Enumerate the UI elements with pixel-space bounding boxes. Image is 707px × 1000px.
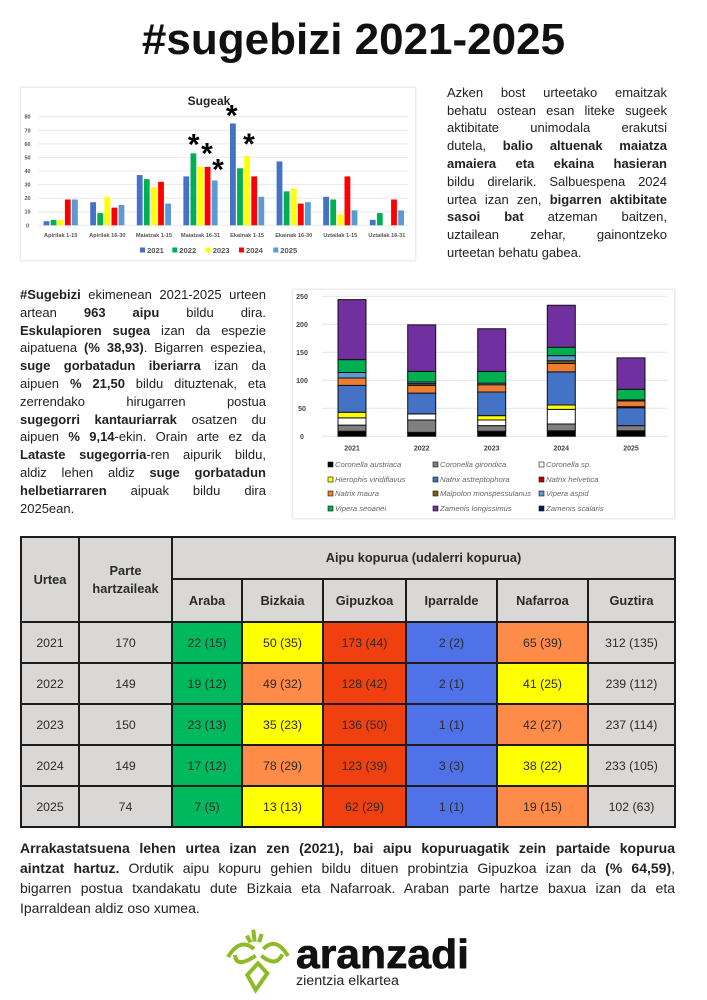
text block: species summary: sugegorri kantauriarrak osatzen du (20, 412, 266, 427)
x axis labels (44, 233, 405, 239)
text block: species summary: aipatuena (% 38,93). Bigarren espeziea, (20, 340, 266, 355)
text block: activity summary: bildu direlarik. Salbuespena 2024 (447, 174, 667, 189)
significance asterisks: * (226, 100, 238, 133)
y axis labels: 70 (24, 128, 31, 134)
legend: Vipera aspid (546, 489, 589, 498)
y axis labels: 80 (24, 115, 31, 121)
data table: citations by year and province: 19 (15) (523, 800, 562, 814)
data table: citations by year and province: 149 (115, 676, 136, 690)
data table: citations by year and province: 23 (13) (188, 718, 226, 732)
significance asterisks (188, 100, 255, 187)
data table: citations by year and province: 13 (13) (263, 800, 302, 814)
data table: citations by year and province: 19 (12) (188, 676, 226, 690)
data table: citations by year and province: 17 (12) (188, 758, 226, 772)
data table: citations by year and province: Urtea (34, 572, 66, 586)
data table: citations by year and province: 123 (39) (342, 758, 387, 772)
x axis labels: Uztailak 1-15 (323, 233, 357, 239)
data table: citations by year and province: 150 (115, 718, 136, 732)
data table: citations by year and province: Araba (189, 592, 225, 608)
y axis labels: 250 (296, 294, 308, 301)
x axis labels: Apirilak 1-15 (44, 233, 77, 239)
legend: Natrix maura (335, 489, 380, 498)
text block: conclusion: Iparraldean aldiz oso xumea. (20, 900, 200, 916)
text block: conclusion: Arrakastatsuena lehen urtea izan zen (2021), bai aipu kopuruagatik zein partaide kopurua (20, 840, 675, 856)
y axis labels: 30 (24, 183, 31, 189)
data table: citations by year and province: 102 (63) (609, 800, 654, 814)
text block: species summary: 2025ean. (20, 501, 74, 516)
wordmark: aranzadi (296, 931, 469, 977)
x axis labels: 2025 (623, 446, 639, 452)
data table: citations by year and province: 173 (44) (342, 636, 387, 650)
text block: activity summary: dutela, balio altuenak maiatza (447, 138, 667, 153)
y axis labels (24, 115, 31, 229)
data table: citations by year and province: Guztira (609, 592, 654, 608)
data table: citations by year and province: 1 (1) (439, 800, 464, 814)
legend: Hierophis viridiflavus (335, 475, 406, 484)
chart title: Sugeak (188, 94, 231, 108)
y axis labels: 40 (24, 169, 31, 175)
y axis labels: 10 (24, 210, 31, 216)
data table: citations by year and province: 2023 (36, 718, 64, 732)
x axis labels (344, 446, 639, 452)
text block: conclusion: bigarren postua txandakatu dute Bizkaia eta Nafarroak. Araban parte hartze baxua izan da eta (20, 880, 675, 896)
data table: citations by year and province: 1 (1) (439, 718, 464, 732)
data table: citations by year and province: 35 (23) (263, 718, 302, 732)
text block: species summary: aipuen % 9,14-ekin. Orain arte ez da (20, 429, 266, 444)
data table: citations by year and province: 149 (115, 758, 136, 772)
x axis labels: Ekainak 16-30 (275, 233, 312, 239)
data table: citations by year and province: 38 (22) (523, 758, 562, 772)
y axis labels: 0 (26, 223, 29, 229)
x axis labels: 2021 (344, 446, 360, 452)
text block: activity summary: aktibitate unimodala erakutsi (447, 120, 667, 135)
text block: species summary: Lataste sugegorria-ren aipurik bildu, (20, 447, 266, 462)
text block: activity summary: behatu ostean esan liteke sugeek (447, 103, 667, 118)
text block: conclusion: aintzat hartuz. Ordutik aipu kopuru gehien bildu dituen probintzia Gipuzkoa izan da (% 64,59), (20, 860, 675, 876)
data table: citations by year and province: 49 (32) (263, 676, 302, 690)
data table: citations by year and province: Nafarroa (516, 592, 569, 608)
data table: citations by year and province: 2025 (36, 800, 64, 814)
text block: species summary: suge gorbatadun iberiarra izan da (20, 358, 266, 373)
data table: citations by year and province: 41 (25) (523, 676, 562, 690)
x axis labels: Uztailak 16-31 (368, 233, 405, 239)
legend (328, 460, 604, 513)
data table: citations by year and province: 62 (29) (345, 800, 384, 814)
panel: stacked bar chart of species (292, 289, 675, 519)
text block: species summary (20, 287, 266, 516)
text block: activity summary: uztailean zehar, gainontzeko (447, 227, 667, 242)
data table: citations by year and province: Gipuzkoa (336, 592, 393, 608)
data table: citations by year and province: Bizkaia (260, 592, 305, 608)
legend: Zamenis scalaris (545, 504, 604, 513)
y axis labels: 20 (24, 196, 31, 202)
legend: 2021 (147, 246, 165, 255)
text block: species summary: Eskulapioren sugea izan da espezie (20, 323, 266, 338)
data table: citations by year and province: 2022 (36, 676, 64, 690)
text block: species summary: helbetiarraren aipuak bildu dira (20, 483, 266, 498)
data table: citations by year and province: 239 (112) (606, 676, 657, 690)
legend: Vipera seoanei (335, 504, 386, 513)
data table: citations by year and province: Aipu kopurua (udalerri kopurua) (326, 550, 521, 565)
text block: activity summary (447, 85, 668, 260)
data table: citations by year and province: 2 (1) (439, 676, 464, 690)
data table: citations by year and province: Parte (109, 562, 142, 578)
data table: citations by year and province: 7 (5) (194, 800, 220, 814)
data table: citations by year and province: 78 (29) (263, 758, 302, 772)
data table: citations by year and province: 128 (42) (342, 676, 387, 690)
text block: species summary: zerrendako hirugarren postua (20, 394, 266, 409)
data table: citations by year and province: Iparralde (424, 592, 479, 608)
y axis labels (296, 294, 308, 441)
data table: citations by year and province: 233 (105) (605, 758, 658, 772)
text block: activity summary: amaiera eta ekaina hasieran (447, 156, 667, 171)
significance asterisks: * (201, 138, 213, 171)
legend: Malpolon monspessulanus (440, 489, 531, 498)
text block: activity summary: sasoi bat atzeman baitzen, (447, 209, 667, 224)
data table: citations by year and province: 74 (119, 800, 132, 814)
x axis labels: 2022 (414, 446, 430, 452)
y axis labels: 150 (296, 350, 308, 357)
significance asterisks: * (188, 129, 200, 162)
text block: species summary: aipuen % 21,50 bildu dituztenak, eta (20, 376, 266, 391)
legend: 2024 (246, 246, 264, 255)
data table: citations by year and province: 42 (27) (523, 718, 562, 732)
legend: Coronella girondica (440, 460, 507, 469)
text block: species summary: #Sugebizi ekimenean 2021-2025 urteen (20, 287, 266, 302)
legend: Natrix helvetica (546, 475, 599, 484)
significance asterisks: * (243, 128, 255, 161)
data table: citations by year and province (20, 536, 676, 828)
legend: Zamenis longissimus (439, 504, 512, 513)
legend (140, 246, 298, 255)
legend: 2022 (179, 246, 196, 255)
x axis labels: Ekainak 1-15 (230, 233, 264, 239)
text block: activity summary: urteetan behatu gabea. (447, 245, 581, 260)
y axis labels: 50 (298, 406, 306, 413)
data table: citations by year and province: 170 (115, 636, 136, 650)
data table: citations by year and province: hartzaileak (92, 580, 159, 596)
data table: citations by year and province: 237 (114) (606, 718, 657, 732)
x axis labels: Apirilak 16-30 (89, 233, 125, 239)
x axis labels: 2023 (484, 446, 500, 452)
tagline: zientzia elkartea (296, 973, 400, 988)
panel: bar chart Sugeak (20, 87, 416, 261)
data table: citations by year and province: 50 (35) (263, 636, 302, 650)
data table: citations by year and province: 312 (135) (605, 636, 658, 650)
bars (44, 123, 404, 225)
data table: citations by year and province: 22 (15) (188, 636, 226, 650)
legend: 2025 (280, 246, 298, 255)
x axis labels: Maiatzak 1-15 (136, 233, 172, 239)
x axis labels: 2024 (554, 446, 569, 452)
title: #sugebizi 2021-2025 (142, 15, 565, 64)
legend: Coronella sp. (546, 460, 591, 469)
legend: Coronella austriaca (335, 460, 402, 469)
data table: citations by year and province: 65 (39) (523, 636, 562, 650)
y axis labels: 50 (24, 155, 31, 161)
y axis labels: 200 (296, 322, 308, 329)
text block: conclusion (20, 840, 676, 916)
data table: citations by year and province: 2 (2) (439, 636, 464, 650)
data table: citations by year and province: 3 (3) (439, 758, 464, 772)
text block: species summary: aldiz lehen aldiz suge gorbatadun (20, 465, 266, 480)
data table: citations by year and province: 2024 (36, 758, 64, 772)
legend: Natrix astreptophora (440, 475, 510, 484)
y axis labels: 100 (296, 378, 308, 385)
logo: aranzadi (226, 930, 469, 994)
data table: citations by year and province: 2021 (36, 636, 64, 650)
text block: species summary: artean 963 aipu bildu dira. (20, 305, 266, 320)
text block: activity summary: Azken bost urteetako emaitzak (447, 85, 667, 100)
legend: 2023 (213, 246, 230, 255)
y axis labels: 0 (300, 434, 304, 441)
icon: green plant (228, 930, 288, 990)
stacked bars (338, 300, 645, 436)
x axis labels: Maiatzak 16-31 (181, 233, 220, 239)
significance asterisks: * (212, 154, 224, 187)
text block: activity summary: urtea izan zen, bigarren aktibitate (447, 192, 667, 207)
data table: citations by year and province: 136 (50) (342, 718, 387, 732)
y axis labels: 60 (24, 142, 31, 148)
